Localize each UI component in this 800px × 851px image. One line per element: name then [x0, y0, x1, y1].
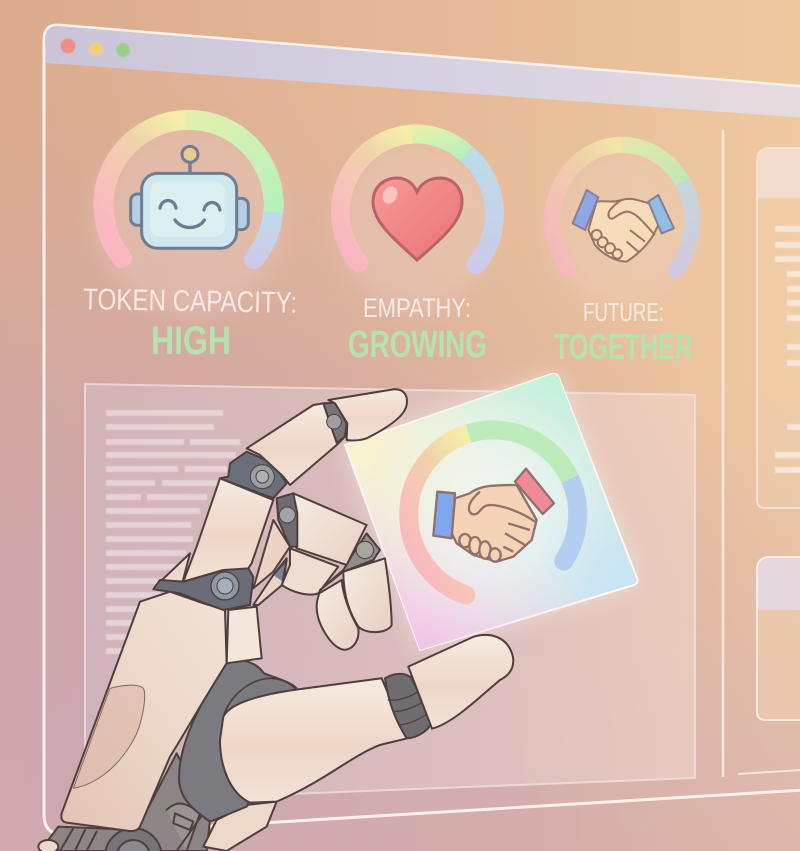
label: future: FUTURE: [583, 297, 664, 327]
floating card: held gauge [345, 373, 638, 650]
icon: heart [373, 178, 462, 260]
window title bar [45, 26, 800, 119]
thumb joint [385, 674, 432, 738]
index finger middle joint [220, 452, 287, 498]
index finger upper joint [323, 403, 347, 443]
right lower header [758, 558, 800, 610]
index finger lower segment [183, 478, 273, 582]
right card lines [775, 226, 800, 473]
text block placeholder lines [106, 410, 240, 654]
forearm plate [61, 592, 262, 831]
card gauge arc [409, 430, 578, 595]
gauge arc [552, 145, 692, 271]
window control dots [60, 38, 130, 57]
panel: right side card top [757, 148, 800, 508]
wrist mechanics [38, 753, 277, 851]
index fingertip [328, 389, 407, 440]
soft glows behind gauges [95, 125, 694, 315]
thumb lower segment [220, 678, 407, 803]
index finger middle segment [247, 403, 345, 485]
thumb joint dark palm [179, 660, 297, 822]
value: high: HIGH [151, 319, 231, 363]
ring and little fingertips [317, 533, 392, 650]
gauge arc [103, 120, 274, 259]
short lower right rule [738, 770, 800, 774]
label: empathy: EMPATHY: [363, 293, 471, 323]
middle finger lower segment [253, 520, 338, 605]
robot hand [38, 389, 513, 851]
value: together: TOGETHER [554, 326, 693, 367]
right card header [758, 149, 800, 198]
gauge: empathy [341, 134, 494, 366]
index finger knuckle [153, 553, 253, 610]
icon: handshake [573, 190, 674, 262]
gauge arc [341, 134, 494, 265]
icon: robot head [131, 146, 248, 248]
middle finger upper segment [277, 493, 367, 565]
value: growing: GROWING [348, 324, 487, 366]
gauge: future [552, 145, 693, 367]
panel: main content area [85, 384, 695, 802]
gauge: token capacity [83, 120, 297, 363]
label: token capacity: TOKEN CAPACITY: [83, 283, 297, 320]
thumb tip [408, 635, 513, 729]
icon: handshake [433, 469, 554, 562]
panel: right side card bottom [757, 557, 800, 720]
divider line [722, 130, 724, 777]
